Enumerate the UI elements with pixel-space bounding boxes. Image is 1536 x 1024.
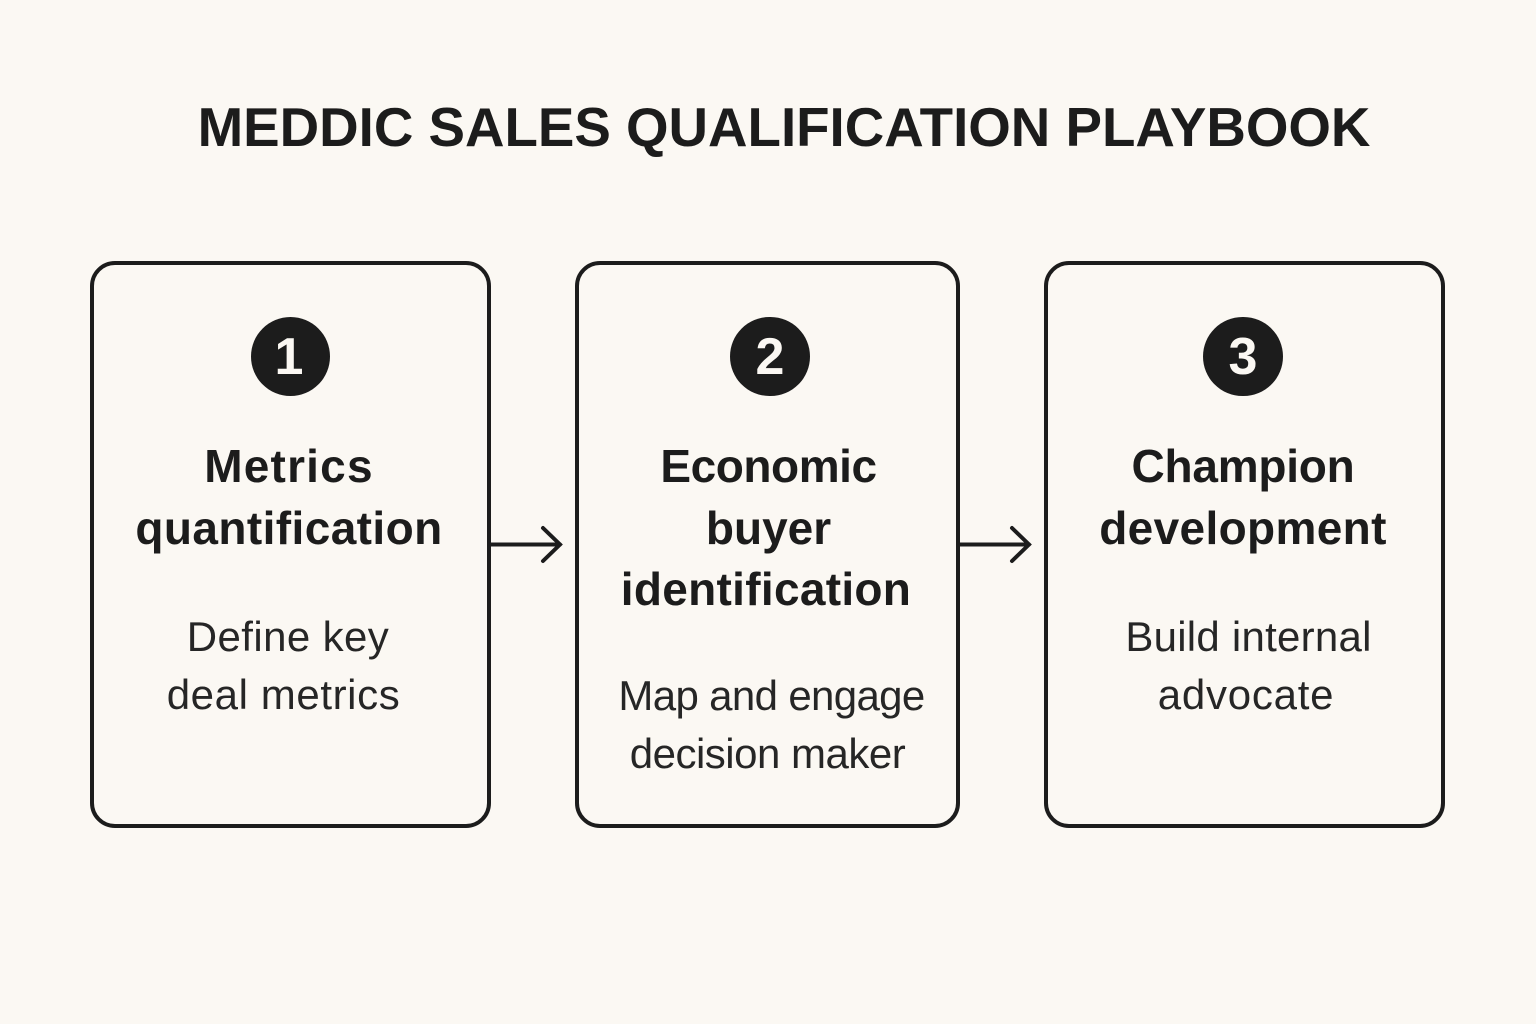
text: build internal advocate (1125, 613, 1372, 718)
heading: champion development (1099, 440, 1387, 554)
title: MEDDIC SALES QUALIFICATION PLAYBOOK (198, 96, 1370, 158)
panel: step 1 metrics (90, 260, 490, 828)
heading: champion development: Champion (1132, 440, 1354, 492)
arrow: step 2 to step 3 (960, 526, 1032, 564)
heading: metrics quantification (135, 440, 443, 554)
heading: metrics quantification: Metrics (204, 440, 374, 492)
text: define key deal metrics: deal metrics (167, 670, 400, 718)
text: map and engage decision maker (618, 672, 925, 776)
arrow: step 1 to step 2 (491, 526, 563, 564)
heading: economic buyer identification (621, 440, 911, 615)
text: build internal advocate: Build internal (1125, 613, 1372, 660)
heading: economic buyer identification: identification (621, 563, 911, 615)
heading: metrics quantification: quantification (135, 502, 443, 554)
text: map and engage decision maker: decision maker (630, 730, 905, 776)
icon: number 2 badge (730, 316, 810, 396)
number 3: 3 (1229, 328, 1257, 386)
heading: economic buyer identification: Economic (660, 440, 877, 492)
heading: champion development: development (1099, 502, 1387, 554)
text: map and engage decision maker: Map and engage (618, 672, 925, 719)
text: define key deal metrics: Define key (187, 613, 389, 660)
panel: step 3 champion (1044, 260, 1444, 828)
number 1: 1 (275, 328, 303, 386)
panel: step 2 economic buyer (574, 260, 960, 828)
icon: number 3 badge (1203, 316, 1283, 396)
icon: number 1 badge (251, 316, 330, 396)
text: build internal advocate: advocate (1158, 670, 1334, 718)
text: define key deal metrics (167, 613, 400, 718)
heading: economic buyer identification: buyer (706, 502, 831, 554)
number 2: 2 (756, 328, 784, 386)
